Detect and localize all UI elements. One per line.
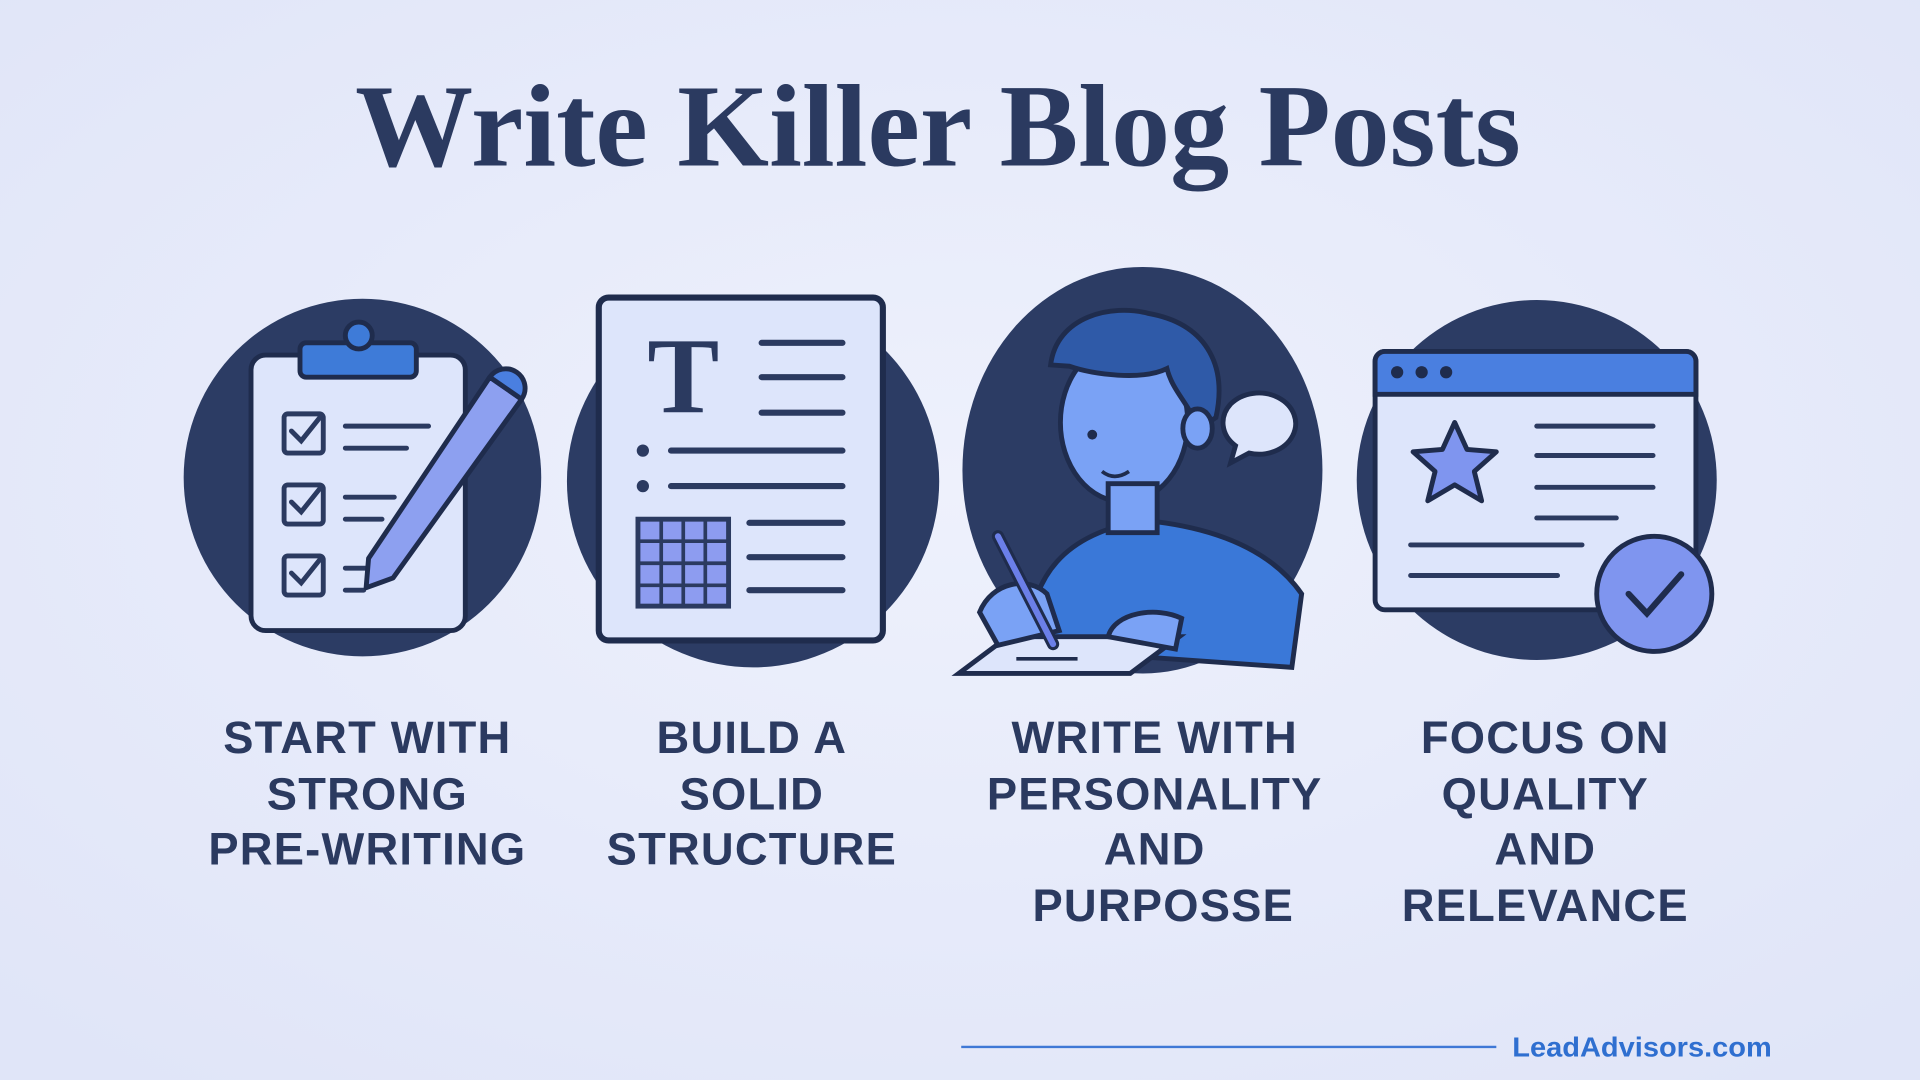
label: quality: QUALITY <box>1442 768 1649 819</box>
icon: document <box>567 295 939 667</box>
label: pre-writing: PRE-WRITING <box>208 823 526 874</box>
label: personality: PERSONALITY <box>987 768 1323 819</box>
label: personality: WRITE WITH <box>1011 712 1298 763</box>
label: personality: AND <box>1104 823 1206 874</box>
icon: browser with star and check <box>1357 300 1717 660</box>
panel: structure <box>567 295 939 874</box>
label: personality: PURPOSSE <box>1032 880 1294 931</box>
label: pre-writing: STRONG <box>267 768 468 819</box>
label: structure: SOLID <box>680 768 824 819</box>
label: quality: FOCUS ON <box>1421 712 1670 763</box>
icon: document: T <box>647 318 719 437</box>
label: pre-writing: START WITH <box>223 712 511 763</box>
panel: personality <box>959 267 1323 931</box>
panel: pre-writing <box>184 299 541 874</box>
label: quality: RELEVANCE <box>1402 880 1689 931</box>
panel: quality <box>1357 300 1717 931</box>
label: structure: STRUCTURE <box>607 823 897 874</box>
label: structure: BUILD A <box>657 712 847 763</box>
icon: clipboard and pencil <box>184 299 541 656</box>
icon: person writing <box>959 267 1322 673</box>
footer: brand: LeadAdvisors.com <box>1512 1032 1772 1063</box>
label: quality: AND <box>1494 823 1596 874</box>
title: Write Killer Blog Posts <box>355 61 1521 191</box>
